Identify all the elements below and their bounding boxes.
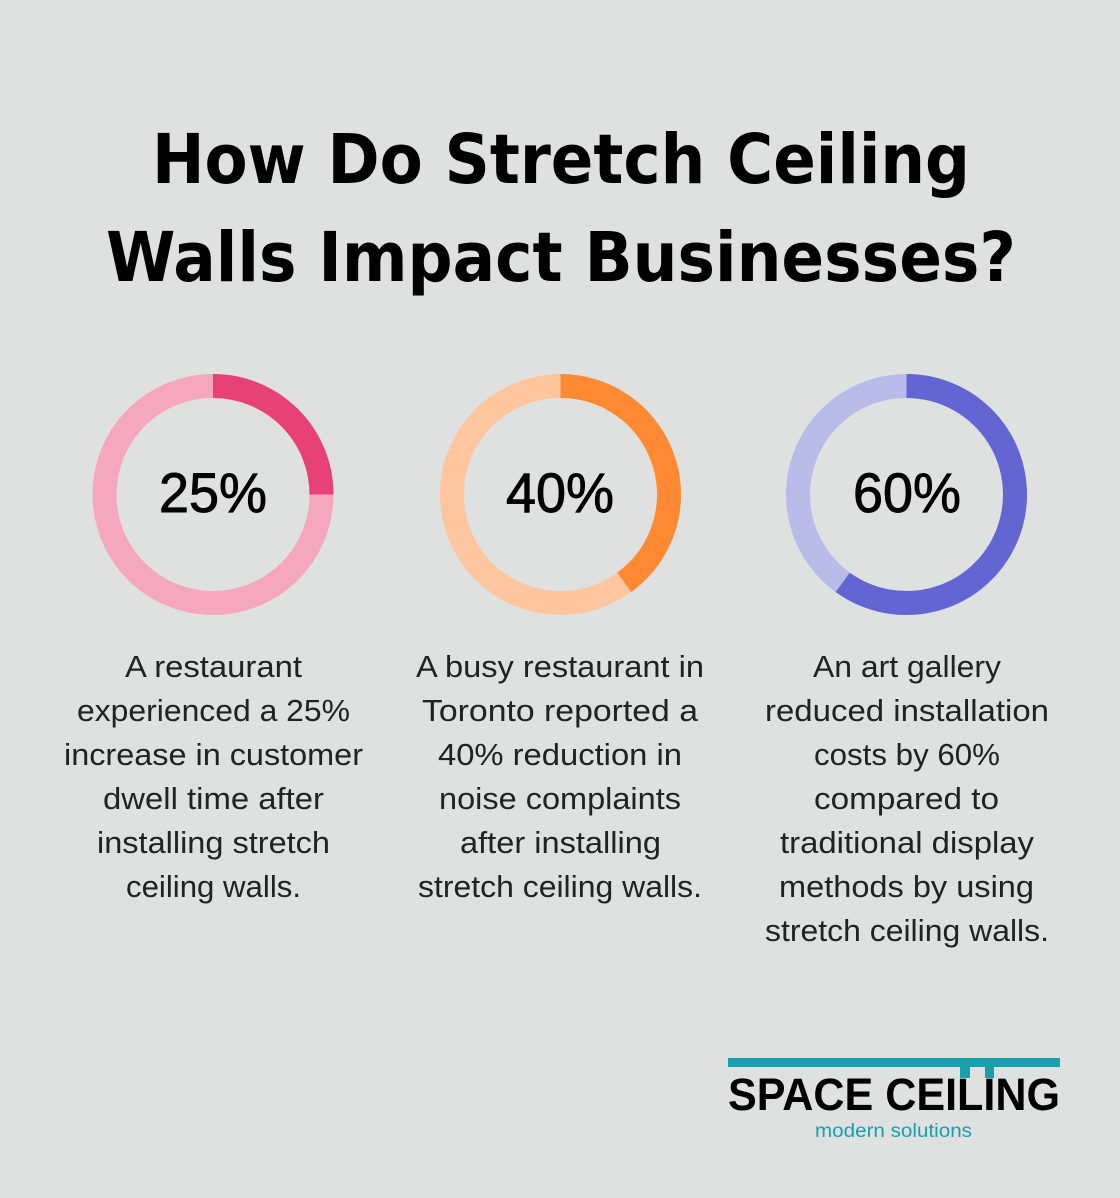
panel: 40% noise complaints xyxy=(416,386,704,904)
value: 40%: 40% xyxy=(506,461,614,524)
logo tagline: modern solutions xyxy=(815,1121,972,1142)
description: restaurant dwell time: increase in customer xyxy=(64,737,363,772)
donut chart: 25% xyxy=(104,386,322,603)
panel: 60% installation costs xyxy=(765,386,1049,948)
title xyxy=(106,120,1016,298)
description: restaurant dwell time: ceiling walls. xyxy=(126,869,301,904)
logo: Space Ceiling xyxy=(728,1058,1060,1142)
description: installation costs: compared to xyxy=(814,781,999,816)
donut chart: 40% xyxy=(452,386,669,603)
description: noise complaints: stretch ceiling walls. xyxy=(418,869,702,904)
description: restaurant dwell time: installing stretch xyxy=(97,825,330,860)
description: noise complaints: A busy restaurant in xyxy=(416,649,704,684)
description: installation costs: reduced installation xyxy=(765,693,1049,728)
title: How Do Stretch Ceiling xyxy=(152,120,970,200)
description: restaurant dwell time xyxy=(64,649,363,904)
panel: 25% restaurant dwell time xyxy=(64,386,363,904)
description: restaurant dwell time: A restaurant xyxy=(125,649,302,684)
description: installation costs: traditional display xyxy=(780,825,1035,860)
description: installation costs: costs by 60% xyxy=(814,737,1000,772)
donut chart: 60% xyxy=(798,386,1015,603)
description: noise complaints: 40% reduction in xyxy=(438,737,682,772)
logo ceiling bar xyxy=(728,1058,1060,1078)
description: restaurant dwell time: dwell time after xyxy=(103,781,324,816)
title: Walls Impact Businesses? xyxy=(106,218,1016,298)
value: 60%: 60% xyxy=(853,461,961,524)
description: installation costs: stretch ceiling walls. xyxy=(765,913,1049,948)
description: installation costs: An art gallery xyxy=(813,649,1002,684)
description: noise complaints: noise complaints xyxy=(439,781,681,816)
logo wordmark: SPACE CEILING xyxy=(728,1069,1060,1120)
description: installation costs xyxy=(765,649,1049,948)
description: noise complaints: Toronto reported a xyxy=(422,693,699,728)
value: 25%: 25% xyxy=(159,461,267,524)
description: noise complaints xyxy=(416,649,704,904)
description: restaurant dwell time: experienced a 25% xyxy=(77,693,350,728)
description: noise complaints: after installing xyxy=(460,825,661,860)
description: installation costs: methods by using xyxy=(779,869,1034,904)
